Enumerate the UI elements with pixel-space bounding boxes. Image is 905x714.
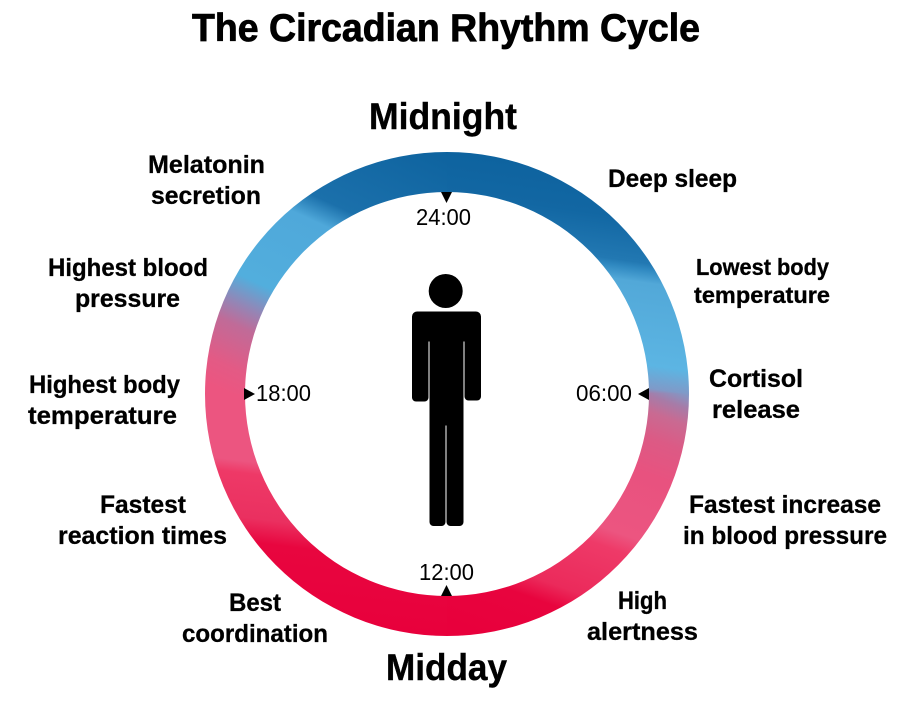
label: fastest reaction times: Fastest (100, 491, 187, 519)
label: best coordination: Best (229, 589, 282, 617)
label: fastest increase in blood pressure: in blood pressure (683, 522, 887, 550)
label: high alertness: High (618, 587, 667, 615)
label: highest blood pressure: Highest blood (48, 254, 208, 282)
label: cortisol release: release (712, 396, 800, 424)
heading: midnight: Midnight (369, 96, 517, 137)
label: melatonin secretion: secretion (151, 182, 261, 210)
time marker: 12:00: 12:00 (419, 559, 474, 585)
label: melatonin secretion: Melatonin (148, 151, 265, 179)
label: best coordination (182, 589, 328, 648)
label: deep sleep: Deep sleep (608, 165, 737, 193)
time marker: 06:00: 06:00 (576, 380, 632, 406)
label: best coordination: coordination (182, 620, 328, 648)
time marker: 24:00: 24:00 (416, 204, 471, 230)
label: highest body temperature: temperature (28, 402, 177, 430)
time marker: 18:00: 18:00 (256, 380, 311, 406)
label: high alertness: alertness (587, 618, 698, 646)
heading: midday: Midday (386, 647, 507, 688)
label: highest blood pressure: pressure (75, 285, 180, 313)
time marker: 24:00 (416, 192, 471, 230)
label: fastest reaction times (58, 491, 227, 550)
label: high alertness (587, 587, 698, 646)
label: highest body temperature: Highest body (29, 371, 180, 399)
label: lowest body temperature: Lowest body (696, 254, 829, 280)
label: lowest body temperature (694, 254, 830, 308)
time marker: 12:00 (419, 559, 474, 596)
label: melatonin secretion (148, 151, 265, 210)
label: highest blood pressure (48, 254, 208, 313)
icon: human figure (412, 274, 481, 526)
title: The Circadian Rhythm Cycle (192, 7, 700, 50)
label: fastest increase in blood pressure: Fastest increase (689, 491, 881, 519)
label: fastest increase in blood pressure (683, 491, 887, 550)
gradient clock ring (205, 152, 689, 636)
label: cortisol release (709, 365, 803, 424)
label: highest body temperature (28, 371, 180, 430)
label: cortisol release: Cortisol (709, 365, 803, 393)
label: lowest body temperature: temperature (694, 282, 830, 308)
label: fastest reaction times: reaction times (58, 522, 227, 550)
